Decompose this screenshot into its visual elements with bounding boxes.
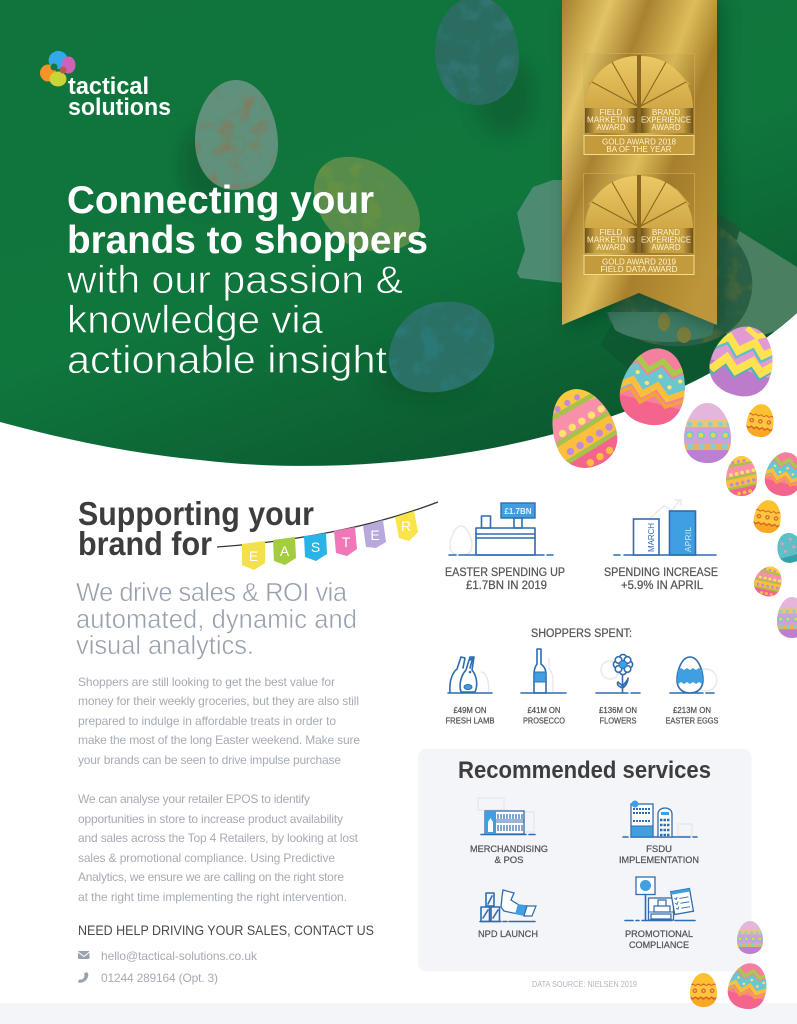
award 2018: GOLD AWARD 2018: [602, 138, 677, 146]
flag S: S: [311, 539, 320, 555]
section heading: brand for: [78, 525, 212, 562]
spend item: easter eggs: [666, 657, 718, 726]
spend item: prosecco: [521, 649, 566, 726]
caption: EASTER SPENDING UP: [445, 567, 565, 579]
bunting: EASTER: [217, 502, 438, 570]
icon: March vs April bars: [614, 500, 716, 555]
label: PROMOTIONAL: [625, 929, 693, 940]
label: NPD LAUNCH: [478, 929, 538, 940]
award 2019: GOLD AWARD 2019: [602, 258, 677, 266]
contact block: hello@tactical-solutions.co.uk: [101, 949, 258, 963]
label: IMPLEMENTATION: [619, 855, 699, 866]
icon: checkout counter: £1.7BN: [504, 507, 532, 516]
sub heading: automated, dynamic and: [76, 606, 357, 634]
flag T: T: [342, 534, 351, 550]
caption: [599, 706, 637, 726]
service: promotional compliance: [625, 877, 695, 951]
flag E: [363, 520, 386, 548]
award 2019: AWARD: [596, 243, 626, 252]
service: NPD launch: [478, 890, 538, 940]
hero: green curved banner with eggs: [0, 0, 797, 466]
decorative coloured eggs: [539, 317, 797, 638]
section heading: Supporting your: [78, 495, 314, 532]
label: [619, 844, 699, 866]
body paragraph 2: at the right time implementing the right intervention.: [78, 890, 347, 904]
caption: £213M ON: [673, 706, 711, 715]
hero headline: [66, 179, 428, 382]
caption: £1.7BN IN 2019: [466, 580, 547, 592]
body paragraph 2: [78, 792, 359, 904]
body paragraph 1: [78, 675, 360, 767]
logo mark: [40, 48, 76, 86]
label: & POS: [494, 855, 524, 866]
flag A: [273, 537, 296, 565]
icon: bottle: [521, 649, 566, 693]
caption: [604, 567, 718, 592]
icon: March vs April bars: APRIL: [684, 526, 693, 552]
spend item: flowers: [596, 654, 640, 726]
caption: EASTER EGGS: [666, 716, 718, 726]
sub heading: We drive sales & ROI via: [76, 579, 348, 607]
logo: solutions: [68, 94, 171, 121]
label: [470, 844, 548, 866]
caption: FRESH LAMB: [446, 716, 494, 726]
body paragraph 1: Shoppers are still looking to get the best value for: [78, 675, 335, 689]
label: FSDU: [646, 844, 672, 855]
caption: £41M ON: [528, 706, 561, 715]
flag E: E: [370, 527, 380, 543]
logo: [40, 48, 171, 121]
caption: PROSECCO: [523, 716, 565, 726]
caption: £136M ON: [599, 706, 637, 715]
icon: promo stand and checklist: [625, 877, 695, 920]
icon: display units: [623, 800, 697, 837]
icon: March vs April bars: MARCH: [647, 523, 656, 552]
hero eggs in background: [181, 0, 535, 401]
award 2018: MARKETING: [587, 116, 635, 124]
icon: shelf: [478, 798, 535, 834]
hero headline: brands to shoppers: [67, 219, 428, 262]
award 2019: BRAND: [652, 228, 680, 237]
caption: [523, 706, 565, 726]
body paragraph 2: opportunities in store to increase product availability: [78, 812, 343, 826]
stat: spending increase: [604, 500, 718, 592]
caption: [666, 706, 718, 726]
eggs overlapping panel: [690, 921, 774, 1013]
hero headline: with our passion &: [66, 259, 403, 302]
service: FSDU: [619, 800, 699, 866]
flag S: [304, 533, 327, 561]
award 2018: BA OF THE YEAR: [606, 145, 672, 154]
award 2018: AWARD: [596, 123, 626, 132]
label: MERCHANDISING: [470, 844, 548, 855]
icon: decorated egg: [670, 657, 717, 693]
caption: SPENDING INCREASE: [604, 567, 718, 579]
flag R: [395, 511, 418, 541]
shoppers spent heading: SHOPPERS SPENT:: [531, 628, 632, 640]
contact block: 01244 289164 (Opt. 3): [101, 971, 218, 985]
caption: [445, 567, 565, 592]
sub heading: visual analytics.: [76, 632, 254, 660]
footer band: [0, 1003, 797, 1024]
label: COMPLIANCE: [629, 940, 689, 951]
icon: hand placing product: [480, 890, 536, 922]
hero headline: actionable insight: [67, 339, 387, 382]
award 2018: AWARD: [651, 123, 681, 132]
flag T: [334, 527, 357, 556]
award 2019: [584, 174, 694, 274]
body paragraph 1: your brands can be seen to drive impulse purchase: [78, 753, 341, 767]
award 2019: AWARD: [651, 243, 681, 252]
flag A: A: [280, 543, 290, 559]
body paragraph 2: Analytics, we ensure we are calling on the right store: [78, 870, 344, 884]
logo wordmark: tactical: [68, 73, 149, 100]
contact block: [78, 923, 374, 985]
flag E: [242, 541, 265, 570]
icon: phone: [78, 972, 88, 983]
flag R: R: [401, 518, 411, 534]
body paragraph 1: prepared to indulge in affordable treats in order to: [78, 714, 336, 728]
caption: £49M ON: [454, 706, 487, 715]
service: merchandising: [470, 798, 548, 866]
sub heading: [76, 579, 357, 660]
hero headline: knowledge via: [67, 299, 323, 342]
caption: FLOWERS: [600, 716, 636, 726]
contact block: NEED HELP DRIVING YOUR SALES, CONTACT US: [78, 923, 374, 938]
body paragraph 2: and sales across the Top 4 Retailers, by looking at lost: [78, 831, 359, 845]
award 2018: BRAND: [652, 108, 680, 117]
award 2019: FIELD: [600, 228, 623, 237]
data source: DATA SOURCE: NIELSEN 2019: [532, 980, 637, 989]
body paragraph 1: make the most of the long Easter weekend. Make sure: [78, 733, 360, 747]
label: [625, 929, 693, 951]
caption: +5.9% IN APRIL: [621, 580, 704, 592]
award 2019: EXPERIENCE: [641, 236, 691, 244]
broken egg shell: [517, 180, 797, 395]
award 2018: [584, 54, 694, 154]
icon: envelope: [78, 951, 90, 959]
body paragraph 2: sales & promotional compliance. Using Predictive: [78, 851, 335, 865]
panel: recommended services: [418, 749, 752, 972]
hero headline: Connecting your: [67, 179, 374, 222]
award 2018: EXPERIENCE: [641, 116, 691, 124]
gold award ribbon: [562, 0, 723, 330]
spend item: lamb: [446, 657, 494, 726]
icon: flower: [596, 654, 640, 693]
award 2019: MARKETING: [587, 236, 635, 244]
stat: easter spending: [445, 503, 565, 592]
panel heading: Recommended services: [458, 757, 711, 784]
award 2019: FIELD DATA AWARD: [600, 265, 678, 274]
caption: [446, 706, 494, 726]
icon: lamb: [448, 657, 492, 693]
body paragraph 2: We can analyse your retailer EPOS to identify: [78, 792, 310, 806]
award 2018: FIELD: [600, 108, 623, 117]
flag E: E: [249, 548, 258, 564]
section heading: [78, 495, 314, 562]
body paragraph 1: money for their weekly groceries, but they are also still: [78, 694, 359, 708]
